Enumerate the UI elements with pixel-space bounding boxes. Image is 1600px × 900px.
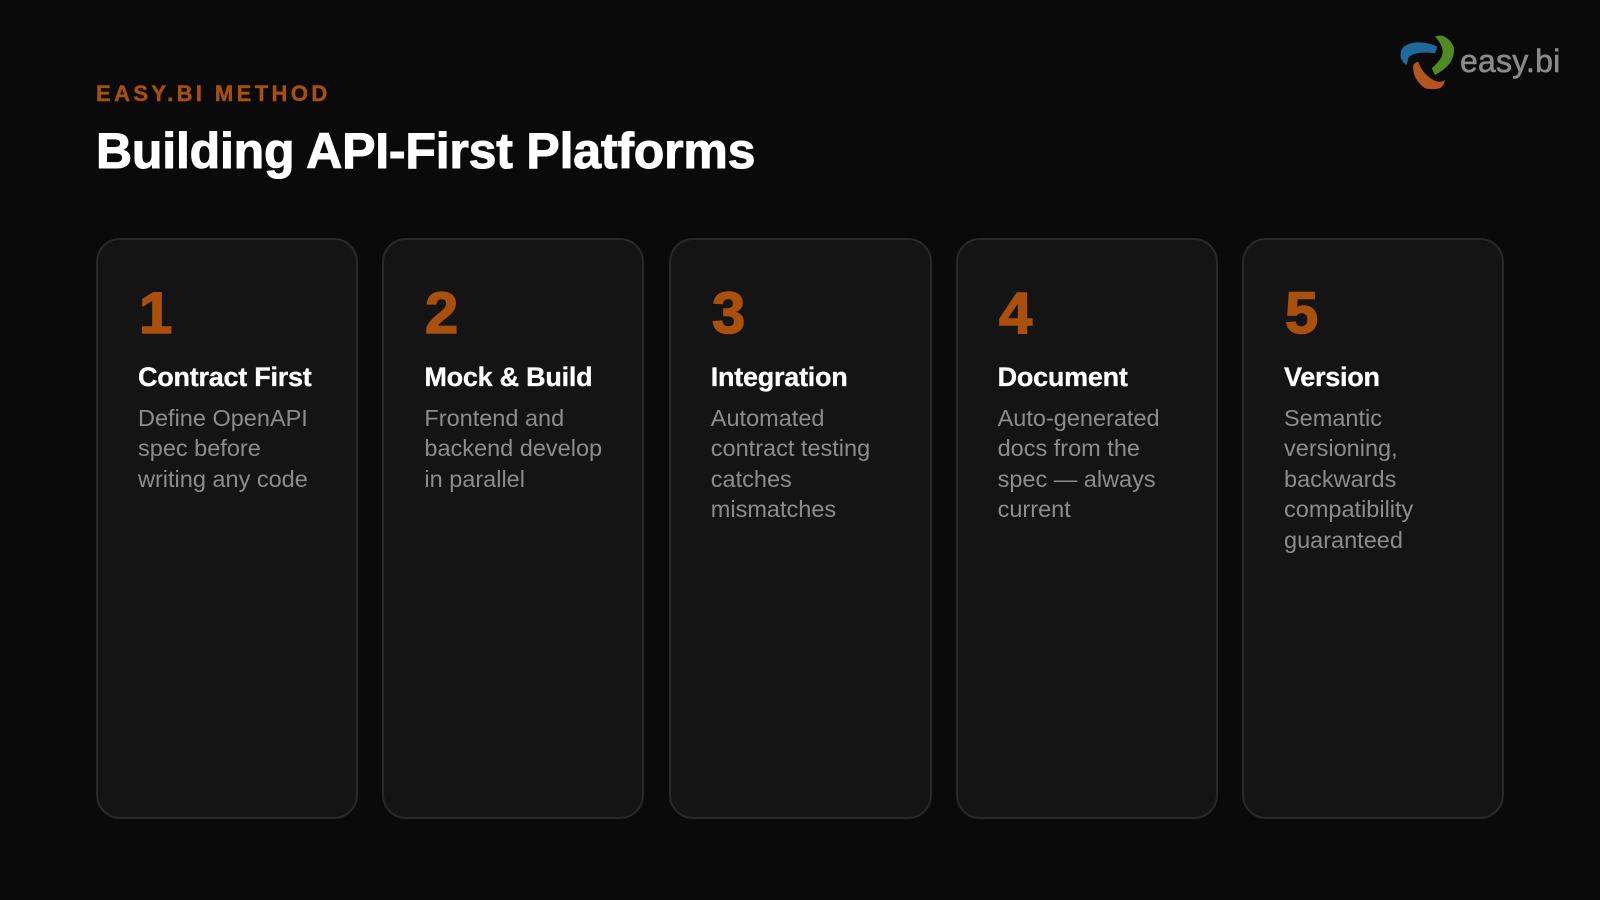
step description 3: Automated <box>711 405 824 431</box>
step description 5: versioning, <box>1284 435 1398 461</box>
step heading 5: Version <box>1284 362 1380 392</box>
step heading 2: Mock & Build <box>424 362 592 392</box>
step description 1: writing any code <box>138 466 308 492</box>
step description 2: backend develop <box>424 435 602 461</box>
step description 4: spec — always <box>998 466 1156 492</box>
step description 3: contract testing <box>711 435 870 461</box>
step heading 1: Contract First <box>138 362 312 392</box>
step heading 3: Integration <box>711 362 848 392</box>
panel: step 5 <box>1242 238 1504 819</box>
step description 5: Semantic <box>1284 405 1382 431</box>
step number 5: 5 <box>1285 281 1318 346</box>
title: Building API-First Platforms <box>96 123 755 179</box>
step heading 4: Document <box>998 362 1128 392</box>
step description 5: compatibility <box>1284 496 1413 522</box>
step description 2: Frontend and <box>424 405 564 431</box>
step number 4: 4 <box>999 281 1032 346</box>
eyebrow label: EASY.BI METHOD <box>96 81 331 106</box>
logo wordmark: easy.bi <box>1460 43 1560 79</box>
step description 3 <box>710 405 870 522</box>
panel: step 4 <box>956 238 1218 819</box>
step description 4: current <box>998 496 1071 522</box>
step number 3: 3 <box>712 281 745 346</box>
step description 2 <box>424 405 602 492</box>
step description 5: guaranteed <box>1284 527 1403 553</box>
step description 4: Auto-generated <box>998 405 1160 431</box>
step description 1: Define OpenAPI <box>138 405 308 431</box>
step description 4: docs from the <box>998 435 1140 461</box>
logo: easy.bi <box>1400 36 1560 90</box>
panel: step 1 <box>96 238 358 819</box>
step description 1: spec before <box>138 435 261 461</box>
panel: step 2 <box>382 238 644 819</box>
step number 2: 2 <box>425 281 459 346</box>
icon: logo mark <box>1400 36 1454 90</box>
step description 5: backwards <box>1284 466 1396 492</box>
step description 3: mismatches <box>711 496 836 522</box>
step description 5 <box>1284 405 1414 553</box>
step description 1 <box>138 405 308 492</box>
step description 3: catches <box>711 466 792 492</box>
step number 1: 1 <box>139 281 172 346</box>
step description 4 <box>998 405 1160 522</box>
panel: step 3 <box>669 238 932 819</box>
step description 2: in parallel <box>424 466 525 492</box>
